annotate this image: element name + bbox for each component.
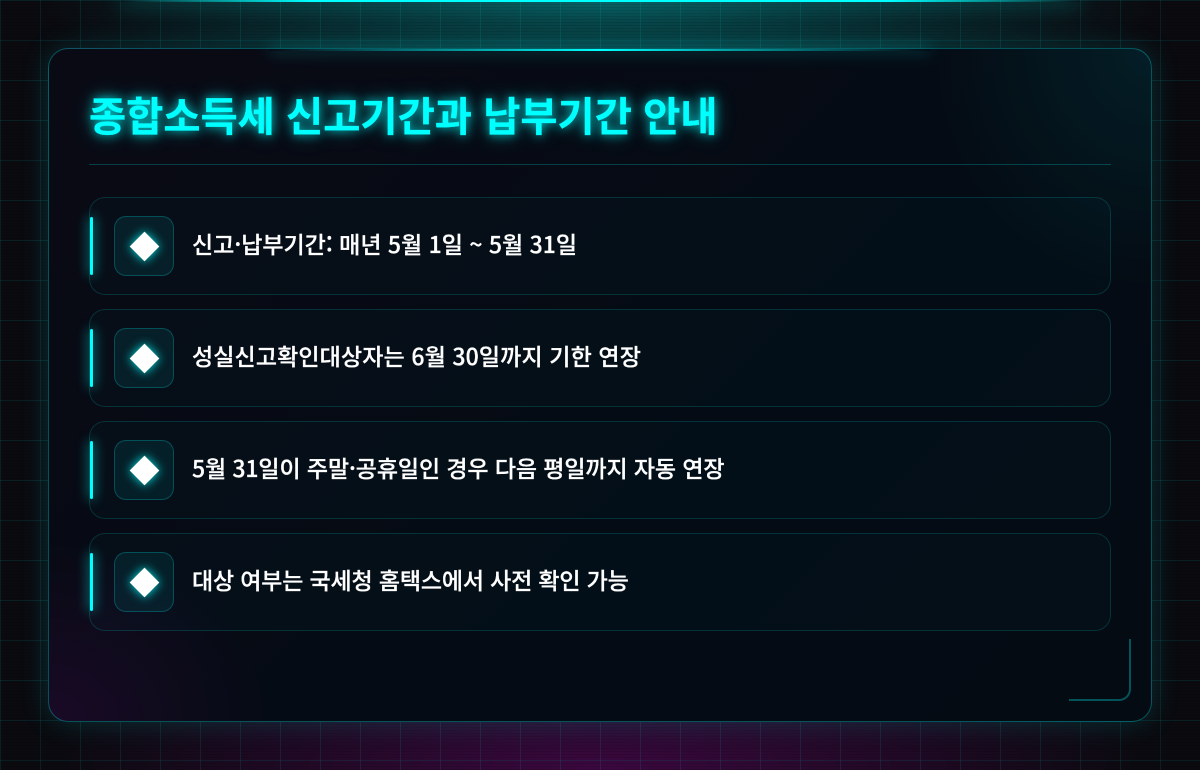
accent bar 3	[90, 441, 93, 499]
list item 2	[89, 309, 1111, 407]
top glow bar	[120, 0, 1080, 2]
icon: diamond 3	[114, 440, 174, 500]
icon: diamond 1	[114, 216, 174, 276]
list item 3	[89, 421, 1111, 519]
accent bar 2	[90, 329, 93, 387]
icon: diamond 2	[114, 328, 174, 388]
text 4: 대상 여부는 국세청 홈택스에서 사전 확인 가능	[192, 562, 629, 596]
title: 종합소득세 신고기간과 납부기간 안내	[89, 84, 717, 143]
list item 4	[89, 533, 1111, 631]
accent bar 1	[90, 217, 93, 275]
list item 1	[89, 197, 1111, 295]
corner bracket	[1069, 639, 1131, 701]
accent bar 4	[90, 553, 93, 611]
text 1: 신고·납부기간: 매년 5월 1일 ~ 5월 31일	[192, 226, 577, 260]
card top glow bar	[269, 49, 931, 51]
text 2: 성실신고확인대상자는 6월 30일까지 기한 연장	[192, 338, 641, 372]
icon: diamond 4	[114, 552, 174, 612]
text 3: 5월 31일이 주말·공휴일인 경우 다음 평일까지 자동 연장	[192, 450, 724, 484]
